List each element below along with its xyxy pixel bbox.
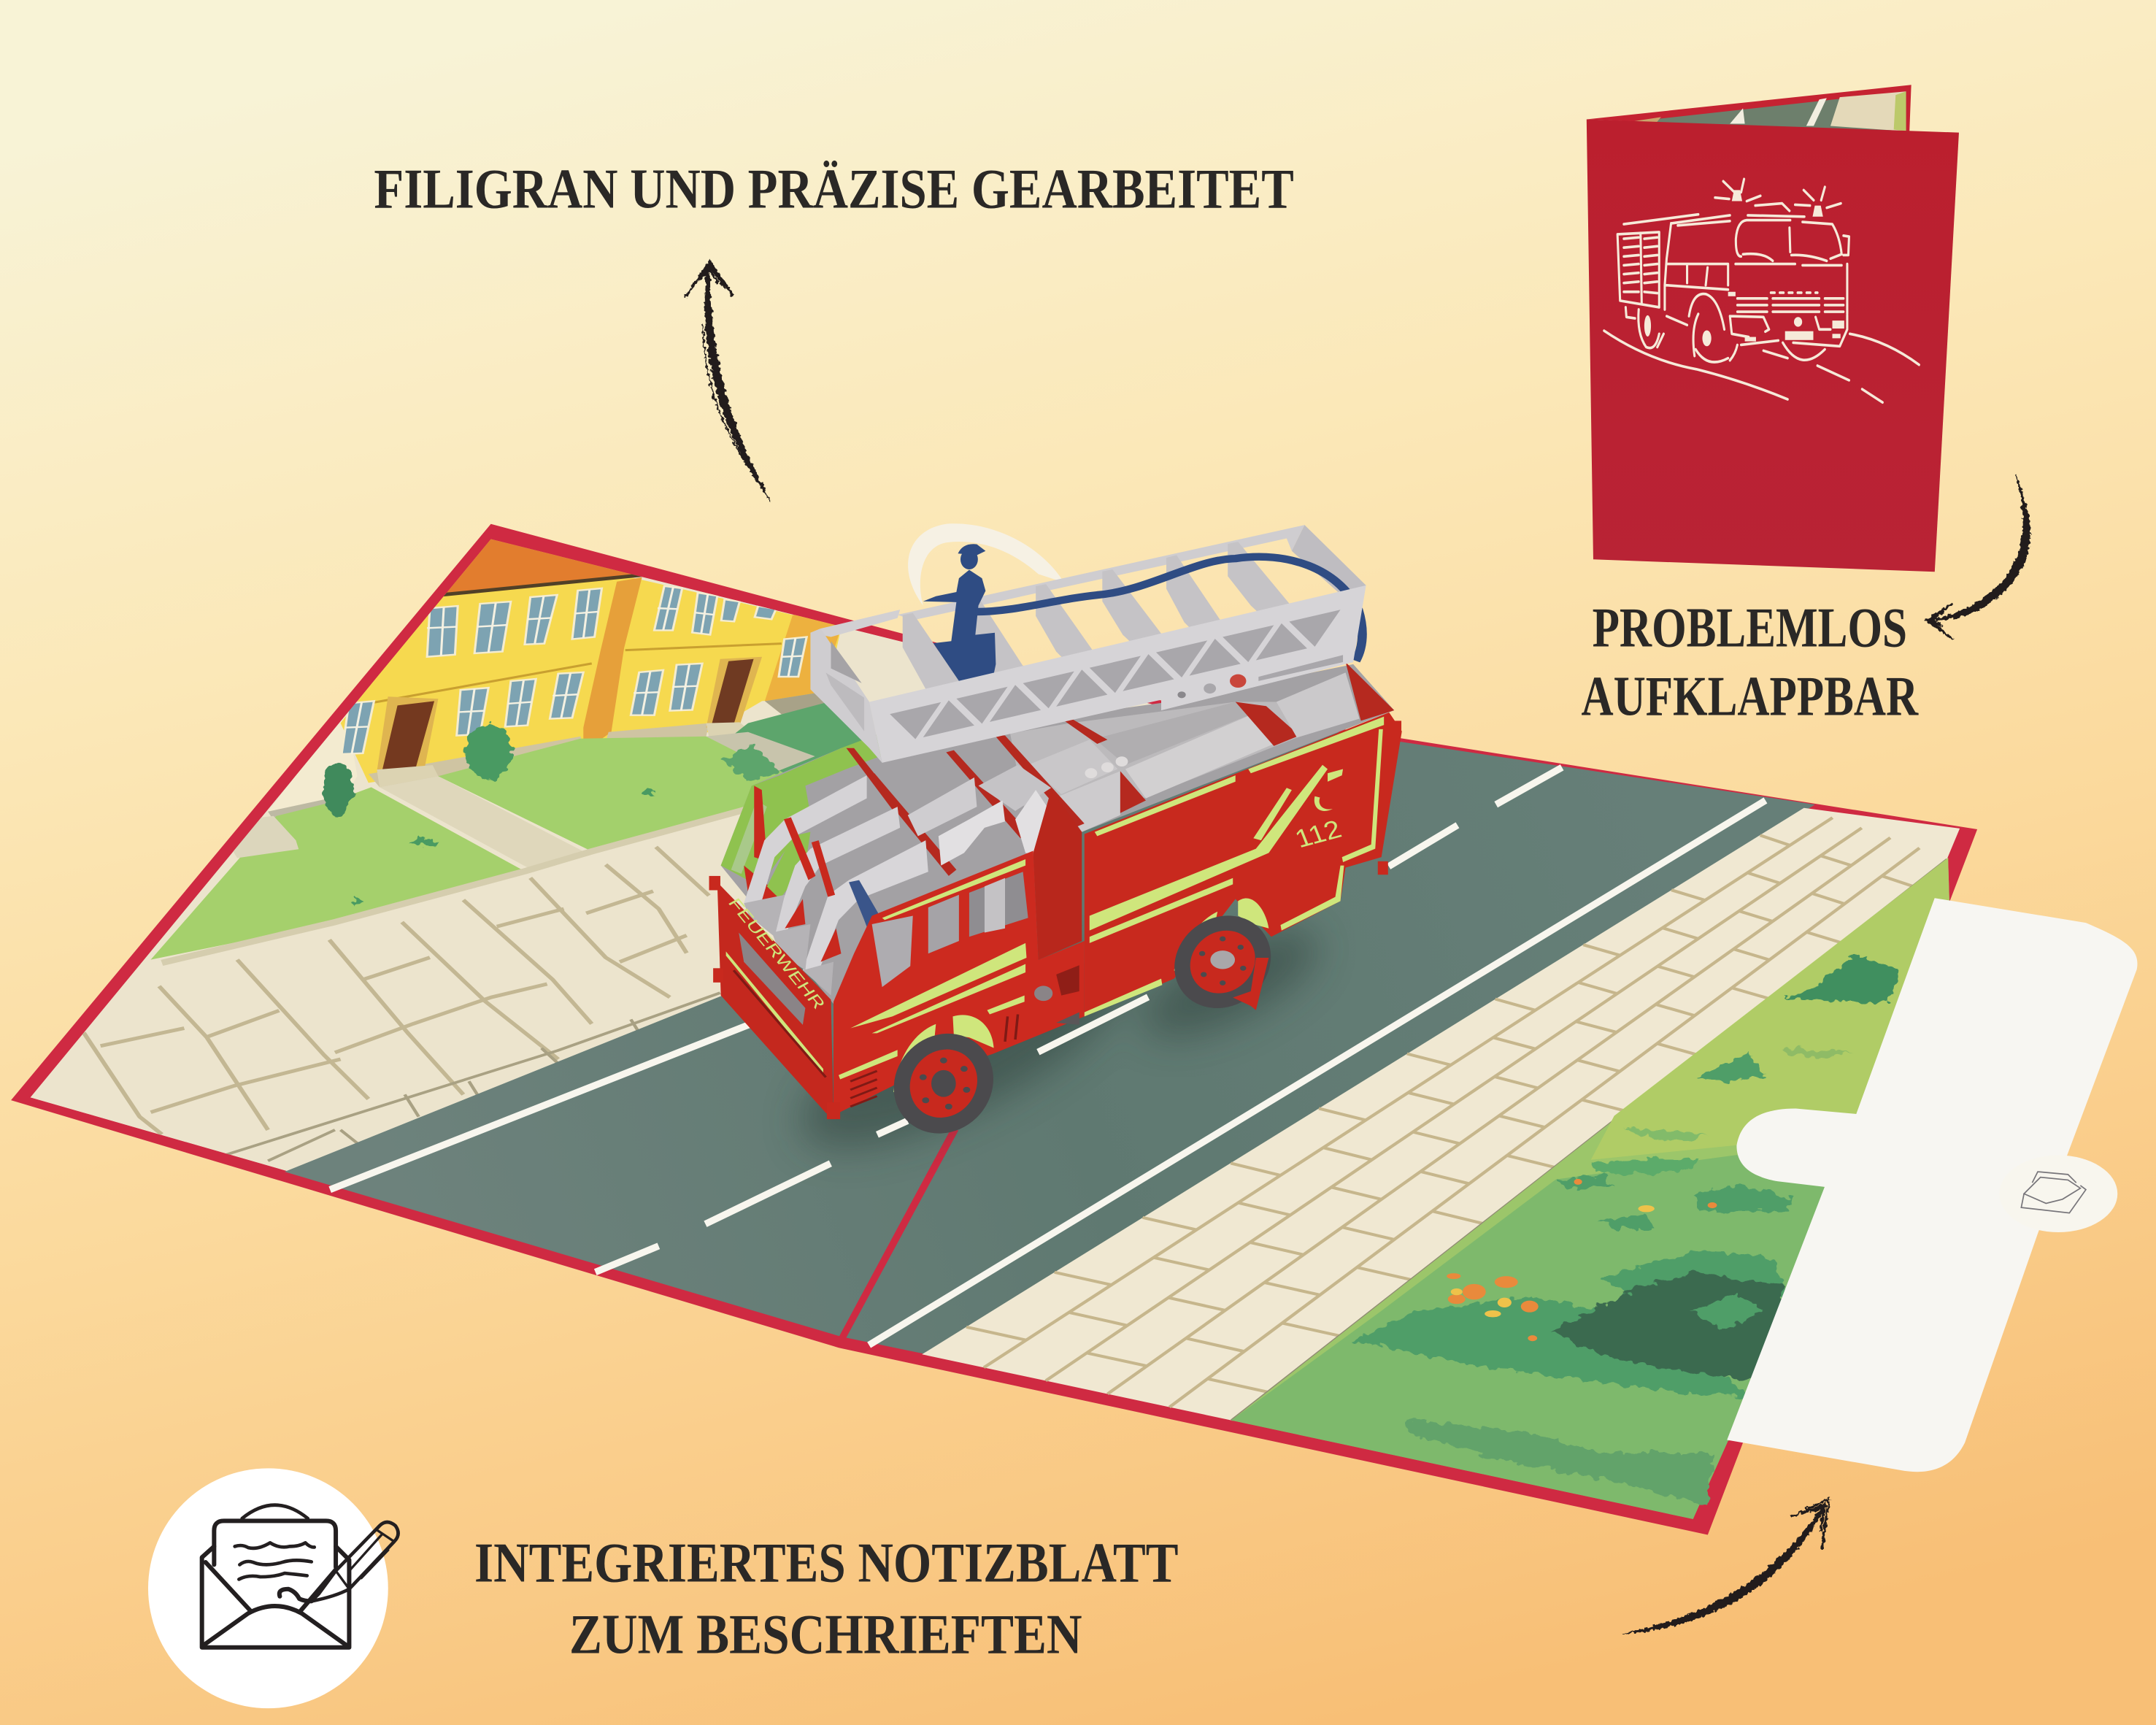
heading: problemlos: PROBLEMLOS — [1593, 596, 1907, 658]
water arc — [908, 523, 1064, 605]
school building — [341, 533, 843, 787]
sticker with envelope — [1999, 1155, 2117, 1232]
heading: aufklappbar: AUFKLAPPBAR — [1582, 665, 1919, 728]
right sidewalk — [922, 808, 1960, 1421]
central divider — [1033, 790, 1082, 960]
shrubs and flowers — [1352, 955, 1901, 1507]
notepad sheet — [1727, 898, 2137, 1472]
road markings — [330, 767, 1766, 1345]
card: red base — [11, 524, 1977, 1534]
arrow: to closed card text — [1926, 475, 2030, 639]
left panel printed scene — [31, 539, 1152, 1171]
centre fold of card — [836, 1128, 958, 1346]
truck body — [709, 712, 1402, 1141]
icon: envelope with letter and pencil — [148, 1468, 399, 1708]
FEUERWEHR lettering: FEUERWEHR — [724, 895, 830, 1012]
wheels — [882, 899, 1285, 1141]
fire engine line art — [1604, 179, 1919, 402]
arrow: to notepad — [1622, 1499, 1829, 1634]
left sidewalk stones — [84, 803, 771, 1161]
fire truck pop-up — [709, 523, 1402, 1141]
road surface — [285, 704, 1815, 1356]
back cover with inner view — [1587, 85, 1911, 133]
truck shadow — [777, 907, 1333, 1185]
heading: integriertes notizblatt: INTEGRIERTES NOTIZBLATT — [474, 1532, 1179, 1594]
passenger figure in cab — [849, 880, 882, 953]
firefighter and hose — [923, 544, 1362, 694]
front cover — [1587, 119, 1959, 572]
arrow: to ladder detail — [685, 261, 771, 502]
ladder back rail and rungs — [810, 525, 1366, 719]
green rear cab panel — [721, 723, 913, 886]
rear box side — [1085, 712, 1402, 1016]
reflective stripes — [726, 717, 1384, 1080]
heading: filigran: FILIGRAN UND PRÄZISE GEARBEITET — [374, 157, 1294, 220]
cab side — [833, 850, 1085, 1117]
cream side building — [290, 714, 347, 783]
112 lettering: 112 — [1291, 815, 1346, 853]
right panel scene — [922, 808, 1960, 1519]
ladder front truss — [810, 585, 1366, 763]
front face — [717, 883, 833, 1117]
lawn and path — [151, 696, 877, 960]
sidewalk stone joints — [966, 818, 1947, 1421]
grass — [1231, 858, 1950, 1519]
closed card on top right — [1587, 85, 1959, 572]
truck interior — [721, 662, 1394, 1004]
heading: zum beschrieften: ZUM BESCHRIEFTEN — [569, 1602, 1082, 1665]
